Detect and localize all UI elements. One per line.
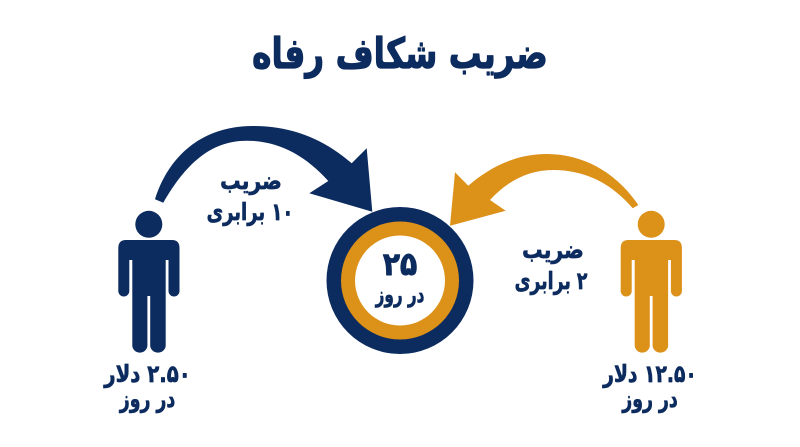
label: right person income: ۱۲.۵۰ دلار: [602, 361, 697, 389]
label: left person income: در روز: [119, 385, 175, 413]
centre value: ۲۵: [383, 246, 417, 283]
centre unit: در روز: [375, 282, 425, 308]
label: right person income: [602, 361, 697, 413]
arrow: navy curved arrow from left person to centre: [155, 126, 372, 212]
label: right person income: در روز: [621, 385, 678, 413]
label: right multiplier: [515, 236, 588, 295]
label: left person income: [103, 361, 191, 413]
arrow: orange curved arrow from right person to centre: [450, 154, 638, 226]
title: ضریب شکاف رفاه: [252, 29, 548, 78]
label: right multiplier: ضریب: [522, 236, 584, 264]
label: left multiplier: ضریب: [220, 167, 282, 195]
icon: navy person: [118, 211, 180, 353]
label: left person income: ۲.۵۰ دلار: [103, 361, 191, 389]
centre circle: [326, 207, 474, 354]
icon: orange person: [621, 211, 682, 353]
label: left multiplier: [207, 167, 293, 227]
label: right multiplier: ۲ برابری: [515, 267, 588, 295]
label: left multiplier: ۱۰ برابری: [207, 199, 293, 227]
